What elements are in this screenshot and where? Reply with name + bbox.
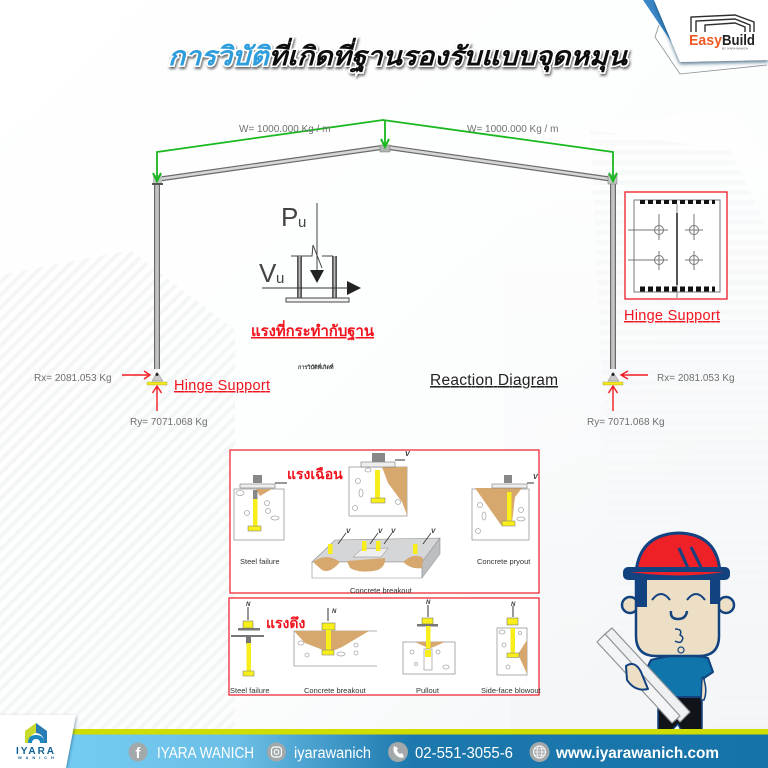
ears [622,597,734,613]
force diagram Pu Vu: u [276,270,284,287]
pryout shear: V [533,474,539,481]
force diagram Pu Vu [259,202,361,302]
breakout shear [349,451,411,516]
hinge support label left: Hinge Support [174,378,270,394]
pullout [403,600,455,695]
load label right: W= 1000.000 Kg / m [467,124,558,135]
panel: shear failure modes [230,450,539,595]
reaction diagram label: Reaction Diagram [430,372,558,389]
icon: phone [388,742,408,762]
reaction label right y: Ry= 7071.068 Kg [587,417,665,428]
top right corner: logo card [643,0,768,74]
concrete breakout block: V [346,528,351,535]
portal frame reaction diagram [34,120,735,428]
logo: EasyBuild [689,15,755,50]
website: www.iyarawanich.com [555,745,719,762]
reaction label right x: Rx= 2081.053 Kg [657,373,735,384]
logo: EasyBuild: Build [722,32,755,49]
tension label: แรงดึง [266,615,305,631]
frame members [152,145,617,369]
steel failure tension [230,602,270,695]
breakout tension: N [332,609,337,615]
hinge support detail panel [625,192,727,299]
trousers [658,695,702,730]
logo: Iyara Wanich [16,723,54,760]
concrete breakout block: V [391,528,396,535]
phone number: 02-551-3055-6 [415,745,513,762]
logo: EasyBuild: BY IYARA WANICH [722,46,748,50]
small caption: การวิบัติที่เกิดที่ [298,363,334,371]
icon: instagram [267,742,286,762]
arm right [701,677,706,700]
engineer mascot [597,533,734,730]
footer contacts [128,742,719,762]
hand [626,664,648,690]
pryout shear [472,474,539,566]
logo: Iyara Wanich: IYARA [16,746,54,757]
footer bar [60,729,768,768]
pullout: Pullout [416,686,440,695]
facebook name: IYARA WANICH [157,745,254,762]
green distributed load [153,120,617,182]
icon: facebook [128,742,148,762]
instagram name: iyarawanich [294,745,371,762]
shear label: แรงเฉือน [287,466,343,482]
concrete breakout block: V [378,528,383,535]
head [636,577,719,656]
side-face blowout: N [511,602,516,608]
icon: globe [530,742,550,762]
pryout shear: Concrete pryout [477,557,531,566]
steel failure shear [234,475,287,566]
concrete breakout block: V [431,528,436,535]
side-face blowout: Side-face blowout [481,686,542,695]
steel failure tension: Steel failure [230,686,270,695]
icon: facebook: f [136,745,142,762]
steel failure shear: Steel failure [240,557,280,566]
base force heading: แรงที่กระทำกับฐาน [251,320,375,341]
reaction label left y: Ry= 7071.068 Kg [130,417,208,428]
face [652,594,705,653]
blueprint rolls [597,628,690,723]
left hinge support [122,371,167,411]
panel: tension failure modes [229,598,542,695]
right hinge support [603,371,648,411]
title: การวิบัติ ที่เกิดที่ฐานรองรับแบบจุดหมุน [168,37,628,74]
shirt [645,655,713,697]
force diagram Pu Vu: u [298,214,306,231]
concrete breakout block [312,528,440,595]
hair [635,578,720,607]
steel failure tension: N [246,602,251,608]
logo: Iyara Wanich: WANICH [18,755,54,760]
breakout tension [294,608,377,695]
load label left: W= 1000.000 Kg / m [239,124,330,135]
breakout shear: V [405,451,411,458]
hard hat [623,533,730,580]
reaction label left x: Rx= 2081.053 Kg [34,373,112,384]
breakout tension: Concrete breakout [304,686,367,695]
side-face blowout [481,602,542,695]
hinge support label right: Hinge Support [624,308,720,324]
logo: EasyBuild: Easy [689,32,723,49]
pullout: N [426,600,431,606]
concrete breakout block: Concrete breakout [350,586,413,595]
footer logo card [0,715,76,768]
force diagram Pu Vu: P [281,202,298,232]
force diagram Pu Vu: V [259,258,277,288]
